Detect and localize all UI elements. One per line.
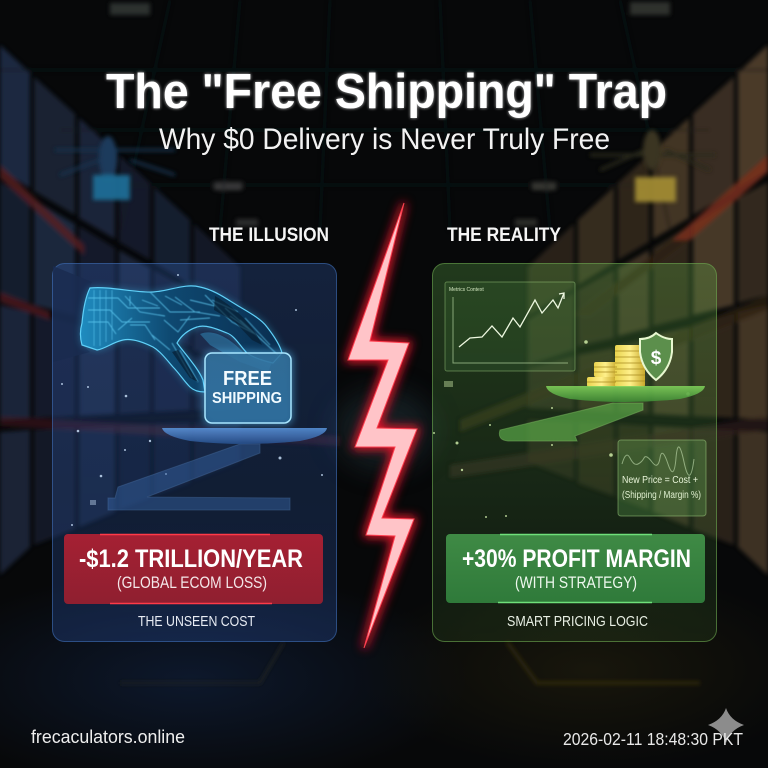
floor lane markings [120, 642, 700, 683]
loss box: (GLOBAL ECOM LOSS) [117, 573, 267, 592]
profit box: +30% PROFIT MARGIN [462, 545, 691, 573]
icon: sparkle watermark [708, 708, 744, 743]
glass pedestal [499, 386, 705, 441]
panel: the reality [432, 264, 716, 642]
column heading: the illusion: THE ILLUSION [209, 224, 329, 246]
pricing formula card [618, 440, 706, 516]
caption: the unseen cost: THE UNSEEN COST [138, 613, 255, 630]
subtitle: Why $0 Delivery is Never Truly Free [159, 123, 610, 156]
icon: circuit hand [80, 286, 282, 392]
profit box: (WITH STRATEGY) [515, 573, 637, 592]
line chart: Metrics Context [449, 287, 484, 293]
icon: dollar shield [640, 333, 672, 380]
sleeve [53, 266, 92, 362]
title: The "Free Shipping" Trap [106, 65, 667, 119]
glass pedestal [108, 428, 327, 510]
loss box [64, 534, 323, 604]
pricing formula card: New Price = Cost + [622, 475, 698, 486]
column heading: the reality: THE REALITY [447, 224, 561, 246]
footer: timestamp: 2026-02-11 18:48:30 PKT [563, 729, 743, 749]
panel: the illusion [52, 264, 336, 642]
free shipping card [203, 351, 293, 425]
footer: website: frecaculators.online [31, 726, 185, 747]
loss box: -$1.2 TRILLION/YEAR [79, 545, 303, 573]
pricing formula card: (Shipping / Margin %) [622, 490, 701, 501]
caption: smart pricing logic: SMART PRICING LOGIC [507, 613, 648, 630]
drone: left, blue [55, 136, 175, 200]
free shipping card: SHIPPING [212, 390, 282, 407]
decorative particles [61, 274, 323, 526]
profit box [446, 534, 705, 603]
free shipping card: FREE [223, 368, 272, 390]
decorative particles [433, 340, 690, 518]
lightning bolt divider [348, 203, 417, 648]
line chart [445, 282, 575, 371]
icon: coin stacks [587, 345, 645, 387]
drone: right, amber [590, 130, 715, 202]
icon: dollar shield: $ [651, 348, 662, 369]
